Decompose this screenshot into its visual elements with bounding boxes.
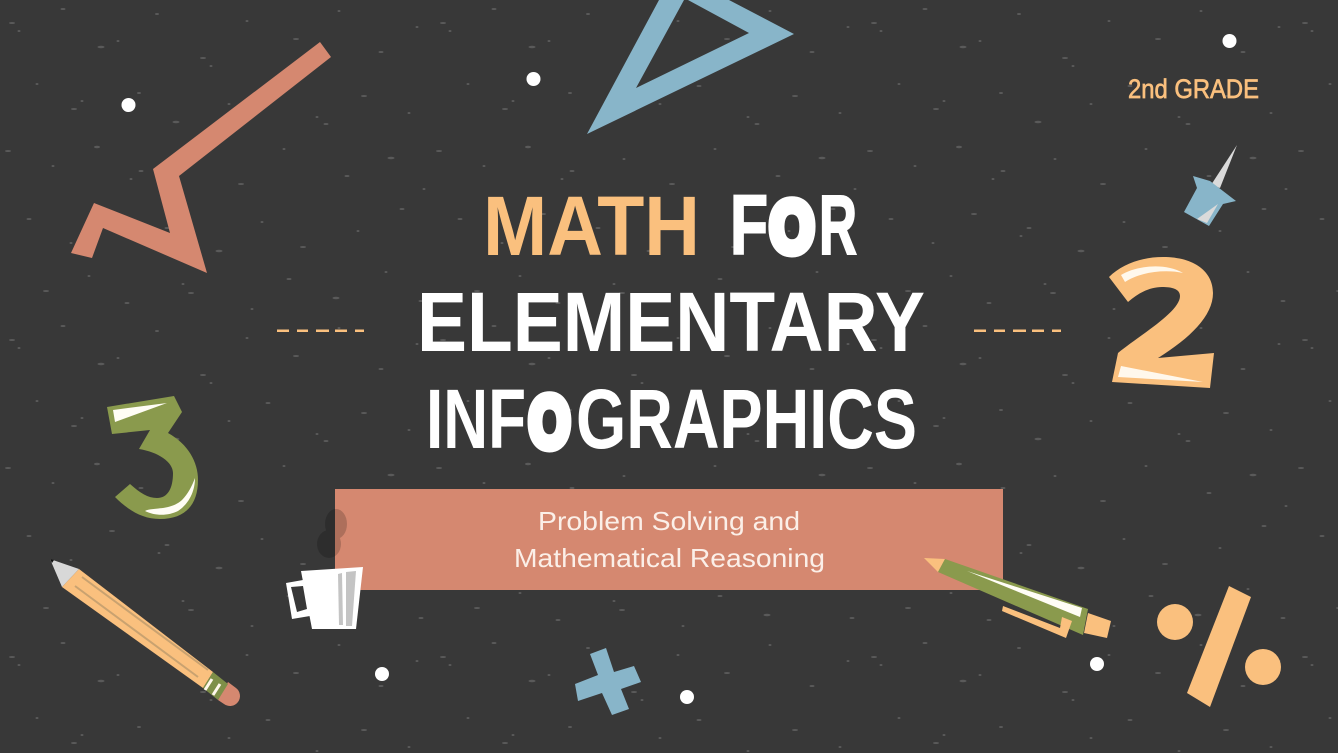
title word: FOR: F	[730, 178, 768, 272]
cup	[286, 567, 363, 629]
dashed line right	[974, 330, 1061, 332]
title line: INFOGRAPHICS: GRAPHICS	[576, 372, 917, 466]
title word: FOR: R	[819, 178, 857, 272]
icon: plus sign	[575, 648, 641, 715]
subtitle line 2: Mathematical Reasoning	[514, 543, 825, 573]
icon: pencil	[50, 559, 240, 706]
icon: push pin	[1184, 145, 1237, 226]
icon: coffee cup	[286, 509, 363, 629]
title line: INFOGRAPHICS: INF	[426, 372, 526, 466]
white dots	[122, 34, 1236, 704]
steam	[317, 509, 347, 558]
grade label: 2nd GRADE	[1128, 74, 1259, 104]
title line: INFOGRAPHICS: O	[529, 383, 570, 463]
subtitle panel	[335, 489, 1003, 590]
zigzag line	[71, 42, 331, 273]
subtitle	[514, 506, 825, 573]
title	[417, 178, 925, 466]
numeral 3	[107, 396, 198, 519]
icon: percent sign	[1157, 586, 1281, 707]
title word: FOR: O	[770, 188, 814, 268]
triangle outline	[587, 0, 794, 134]
title line: ELEMENTARY: ELEMENTARY	[417, 275, 925, 369]
dashed line left	[277, 330, 364, 332]
numeral 2	[1109, 257, 1214, 388]
icon: pen	[924, 558, 1111, 638]
title word: MATH: MATH	[483, 179, 700, 273]
subtitle line 1: Problem Solving and	[538, 506, 800, 536]
